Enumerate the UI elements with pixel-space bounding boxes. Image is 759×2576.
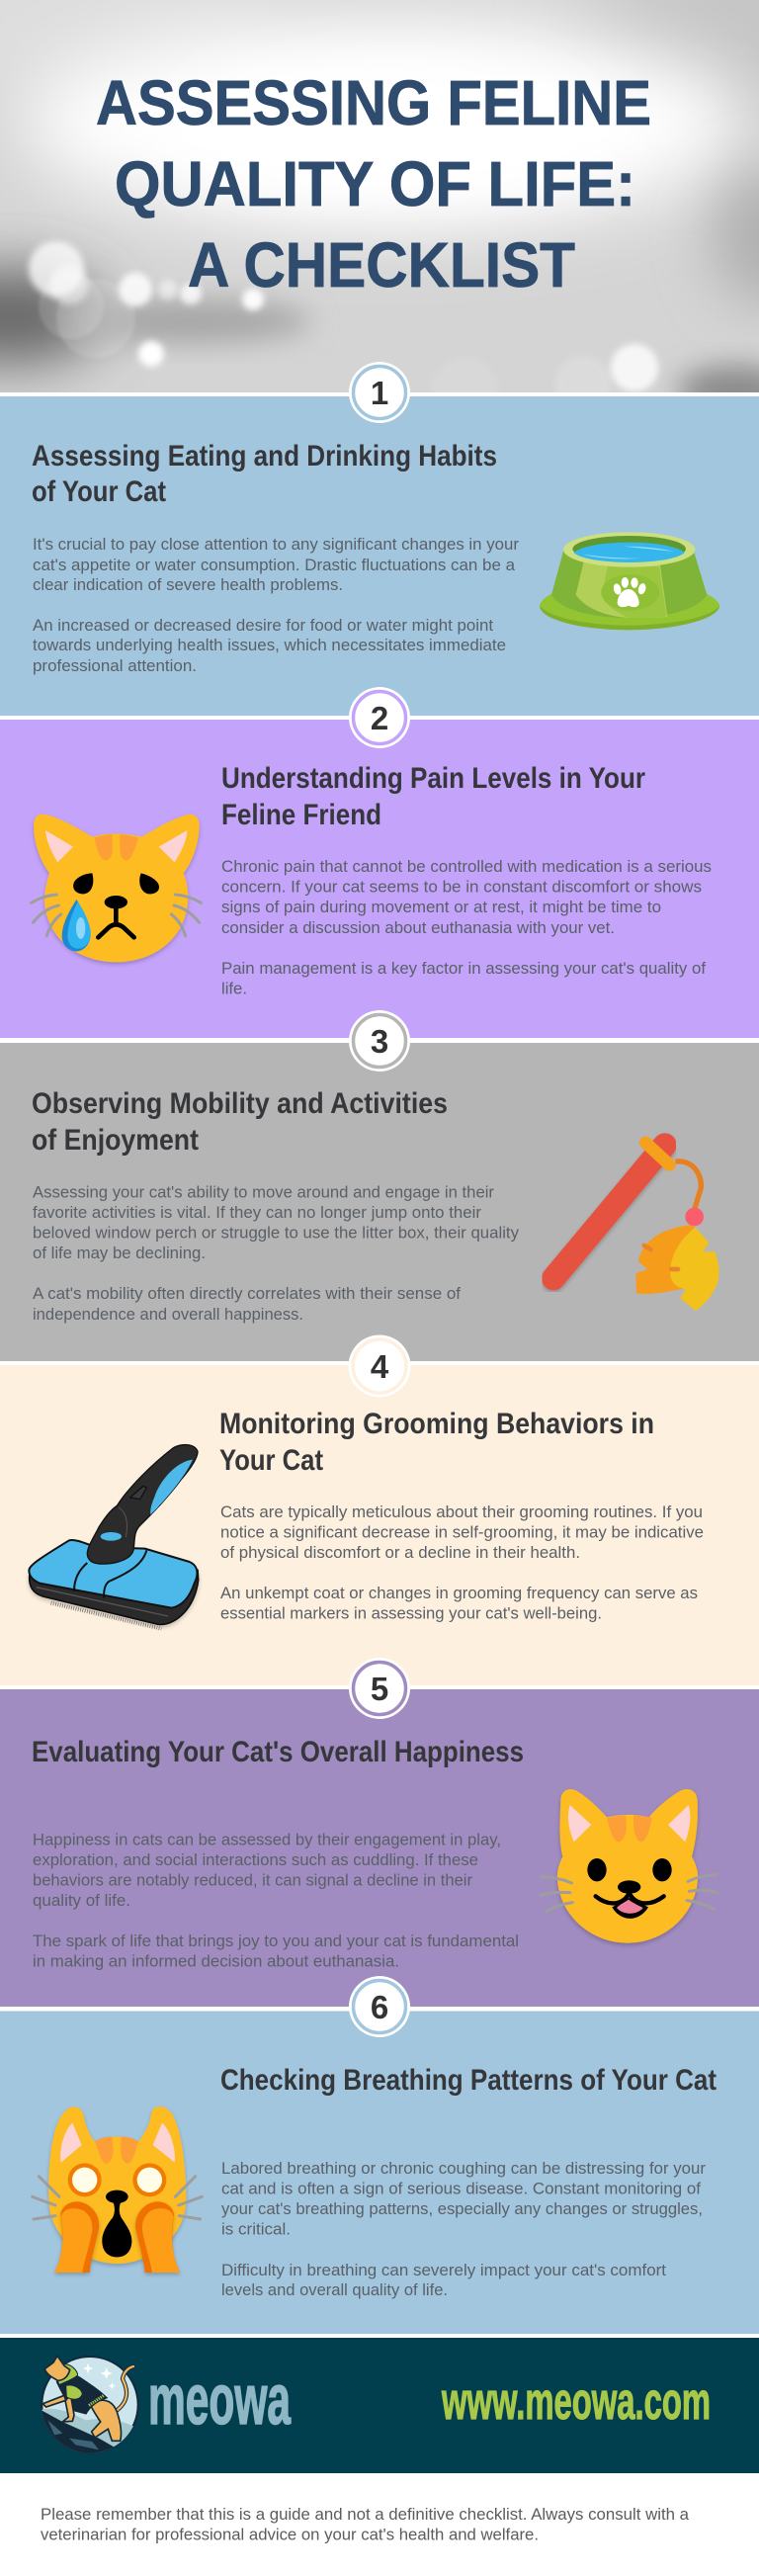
body text 4: essential markers in assessing your cat's well-being. — [220, 1605, 602, 1623]
brand footer bar — [0, 2334, 759, 2473]
body text 3: independence and overall happiness. — [33, 1306, 303, 1324]
number badge 1 — [349, 362, 410, 423]
body text 1: It's crucial to pay close attention to any significant changes in your — [33, 536, 520, 554]
title: A CHECKLIST — [188, 229, 575, 301]
body text 6: your cat's breathing patterns, especially any changes or struggles, — [221, 2200, 703, 2218]
body text 2: Chronic pain that cannot be controlled with medication is a serious — [221, 858, 712, 876]
heading 2: Understanding Pain Levels in Your — [221, 762, 645, 795]
panel 2: pain levels — [0, 687, 759, 1038]
header banner — [0, 0, 759, 425]
icon: slicker grooming brush — [29, 1445, 199, 1629]
body text 4: of physical discomfort or a decline in their health. — [220, 1544, 580, 1562]
body text 6: cat and is often a sign of serious disease. Constant monitoring of — [221, 2181, 701, 2198]
number badge 2: 2 — [371, 700, 388, 736]
body text 5: behaviors are notably reduced, it can signal a decline in their — [33, 1872, 472, 1890]
number badge 6: 6 — [371, 1989, 388, 2025]
icon: grinning cat face — [541, 1789, 717, 1943]
heading 4: Your Cat — [219, 1444, 323, 1477]
body text 6: levels and overall quality of life. — [221, 2281, 448, 2299]
panel 3: mobility — [0, 1010, 759, 1361]
body text 3: A cat's mobility often directly correlates with their sense of — [33, 1285, 461, 1303]
body text 4: Cats are typically meticulous about their grooming routines. If you — [220, 1503, 703, 1521]
body text 5: The spark of life that brings joy to you and your cat is fundamental — [33, 1932, 519, 1950]
logo: meowa cat badge — [40, 2356, 139, 2456]
number badge 6 — [349, 1976, 410, 2037]
body text 3: favorite activities is vital. If they can no longer jump onto their — [33, 1204, 482, 1222]
body text 6: Difficulty in breathing can severely impact your cat's comfort — [221, 2262, 666, 2279]
body text 2: life. — [221, 981, 247, 998]
heading 1: of Your Cat — [32, 475, 166, 508]
number badge 4 — [348, 1334, 411, 1398]
body text 4: An unkempt coat or changes in grooming frequency can serve as — [220, 1585, 698, 1602]
title: QUALITY OF LIFE: — [115, 148, 635, 219]
body text 1: clear indication of severe health problems. — [33, 576, 343, 594]
body text 3: beloved window perch or struggle to use the litter box, their quality — [33, 1224, 520, 1242]
heading 5: Evaluating Your Cat's Overall Happiness — [32, 1736, 524, 1768]
number badge 2 — [349, 687, 410, 748]
icon: feather wand toy — [553, 1143, 719, 1311]
body text 5 — [33, 1831, 519, 1971]
body text 1: towards underlying health issues, which necessitates immediate — [33, 637, 506, 654]
body text 2: consider a discussion about euthanasia with your vet. — [221, 919, 615, 937]
body text 6: Labored breathing or chronic coughing can be distressing for your — [221, 2160, 707, 2178]
panel 6: breathing — [0, 1976, 759, 2334]
body text 1: An increased or decreased desire for food or water might point — [33, 617, 493, 635]
icon: screaming cat face — [33, 2106, 202, 2273]
heading 3: Observing Mobility and Activities — [32, 1087, 448, 1120]
number badge 3: 3 — [371, 1023, 388, 1060]
heading 1: Assessing Eating and Drinking Habits — [32, 440, 497, 472]
heading 2: Feline Friend — [221, 799, 381, 831]
body text 2: signs of pain during movement or at rest, it might be time to — [221, 899, 661, 916]
body text 3 — [33, 1184, 520, 1324]
body text 5: Happiness in cats can be assessed by their engagement in play, — [33, 1831, 501, 1848]
body text 1: professional attention. — [33, 657, 197, 675]
icon: green water bowl — [540, 532, 719, 630]
body text 6 — [221, 2160, 707, 2299]
heading 3 — [32, 1087, 448, 1157]
body text 3: of life may be declining. — [33, 1245, 206, 1262]
number badge 3 — [349, 1010, 410, 1072]
body text 1 — [33, 536, 520, 675]
body text 5: quality of life. — [33, 1892, 130, 1910]
title — [96, 67, 651, 301]
heading 2 — [221, 762, 645, 831]
body text 4: notice a significant decrease in self-grooming, it may be indicative — [220, 1524, 704, 1542]
heading 4 — [219, 1408, 654, 1477]
body text 6: is critical. — [221, 2220, 291, 2238]
body text 3: Assessing your cat's ability to move around and engage in their — [33, 1184, 494, 1202]
icon: crying cat face — [32, 815, 201, 962]
body text 4 — [220, 1503, 704, 1623]
body text 2 — [221, 858, 712, 998]
body text 2: concern. If your cat seems to be in constant discomfort or shows — [221, 878, 702, 896]
heading 1 — [32, 440, 497, 508]
body text 1: cat's appetite or water consumption. Drastic fluctuations can be a — [33, 557, 516, 574]
panel 4: grooming — [0, 1334, 759, 1685]
body text 2: Pain management is a key factor in assessing your cat's quality of — [221, 960, 706, 978]
number badge 4: 4 — [371, 1348, 389, 1385]
number badge 5 — [349, 1658, 410, 1719]
panel 1: eating and drinking — [0, 362, 759, 716]
title: ASSESSING FELINE — [96, 67, 651, 138]
body text 5: in making an informed decision about euthanasia. — [33, 1953, 399, 1971]
number badge 5: 5 — [371, 1671, 388, 1707]
background: grey bokeh — [0, 0, 759, 425]
heading 3: of Enjoyment — [32, 1124, 199, 1157]
disclaimer note: Please remember that this is a guide and not a definitive checklist. Always consult with a — [41, 2506, 690, 2524]
disclaimer note: veterinarian for professional advice on your cat's health and welfare. — [41, 2527, 539, 2544]
heading 4: Monitoring Grooming Behaviors in — [219, 1408, 654, 1440]
panel 5: happiness — [0, 1658, 759, 2007]
logo wordmark: meowa — [148, 2361, 291, 2440]
disclaimer note — [41, 2506, 690, 2544]
body text 5: exploration, and social interactions such as cuddling. If these — [33, 1851, 478, 1869]
number badge 1: 1 — [371, 375, 388, 411]
